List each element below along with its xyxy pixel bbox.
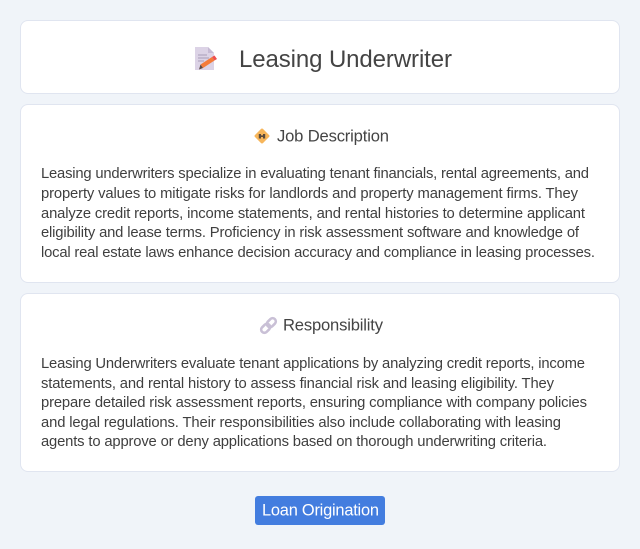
- text: responsibility paragraph: Leasing Underwriters evaluate tenant applications by analyzing credit reports, income: [41, 356, 585, 372]
- panel: title: [20, 20, 620, 94]
- text: responsibility paragraph: and legal regulations. Their responsibilities also include collaborating with leasing: [41, 415, 561, 431]
- heading: Job Description: Job Description: [277, 126, 389, 146]
- button: Loan Origination: Loan Origination: [262, 502, 379, 520]
- icon: chain link: [260, 316, 277, 334]
- button: Loan Origination: [255, 496, 385, 525]
- text: responsibility paragraph: [41, 356, 587, 450]
- panel: responsibility: [20, 293, 620, 472]
- text: job description paragraph: eligibility and lease terms. Proficiency in risk assessment software and knowledge of: [41, 225, 580, 241]
- panel: job description: [20, 104, 620, 283]
- text: job description paragraph: analyze credit reports, income statements, and rental histories to determine applicant: [41, 206, 585, 222]
- heading: Leasing Underwriter: Leasing Underwriter: [239, 46, 452, 73]
- text: job description paragraph: Leasing underwriters specialize in evaluating tenant financials, rental agreements, and: [41, 166, 589, 182]
- text: responsibility paragraph: agents to approve or deny applications based on thorough underwriting criteria.: [41, 434, 547, 450]
- text: job description paragraph: local real estate laws enhance decision accuracy and compliance in leasing processes.: [41, 245, 595, 261]
- icon: document with pencil: [195, 47, 217, 70]
- text: responsibility paragraph: statements, and rental history to assess financial risk and leasing eligibility. They: [41, 376, 555, 392]
- heading: Responsibility: Responsibility: [283, 316, 384, 334]
- text: responsibility paragraph: prepare detailed risk assessment reports, ensuring compliance with company policies: [41, 395, 587, 411]
- text: job description paragraph: property values to mitigate risks for landlords and property management firms. They: [41, 186, 579, 202]
- icon: orange diamond sign: [254, 128, 270, 144]
- text: job description paragraph: [41, 166, 595, 261]
